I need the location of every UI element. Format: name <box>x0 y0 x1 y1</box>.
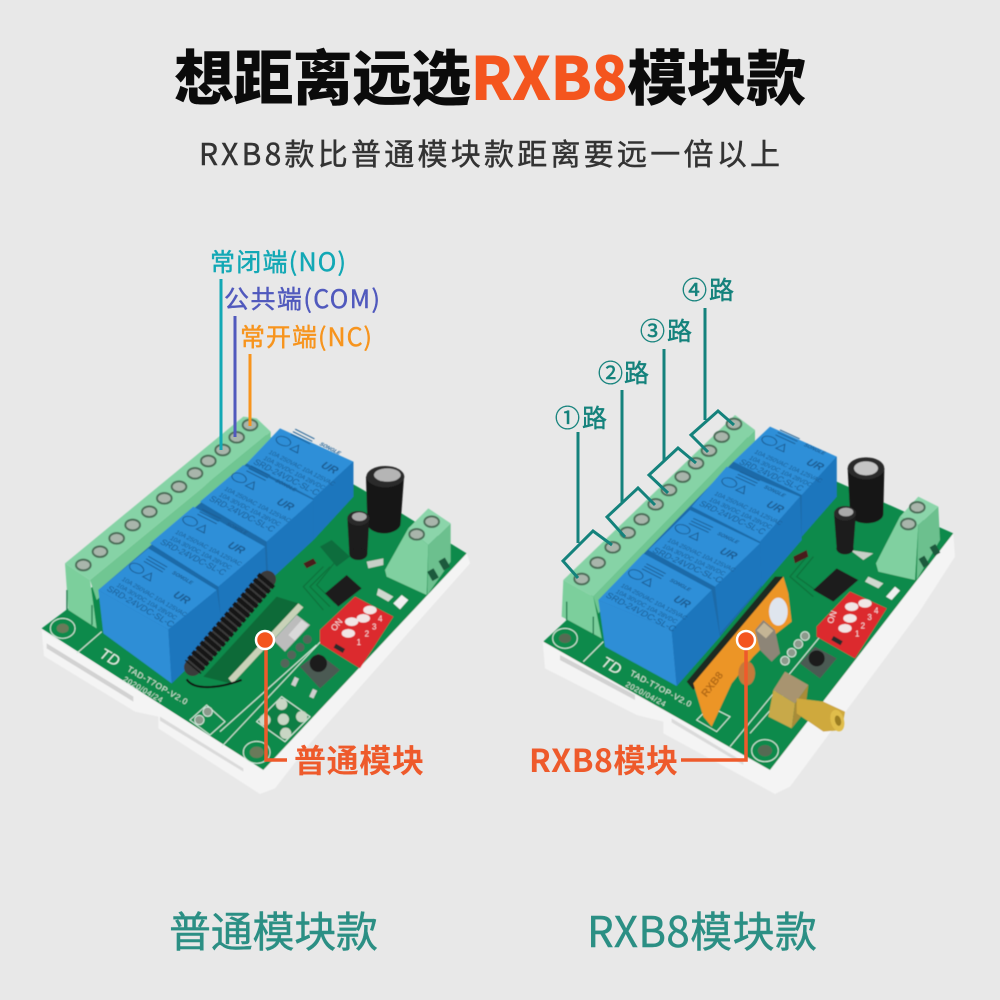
capacitors <box>834 457 884 554</box>
callout: RXB8 module <box>529 631 755 782</box>
callout: normally closed terminal <box>210 243 346 450</box>
board silk text <box>598 654 694 709</box>
product photo: RXB8 module board <box>543 415 955 794</box>
board silk text: TAD-T7OP-V2.0 <box>126 665 190 707</box>
capacitors <box>347 466 404 560</box>
callout: channel 1 <box>555 399 612 578</box>
gold SMA antenna connector <box>768 672 847 733</box>
power terminal block <box>385 508 451 595</box>
long green terminal block <box>562 415 755 638</box>
black spring antenna <box>187 579 267 687</box>
callout: standard module: 普通模块 <box>294 736 424 782</box>
standard receiver module <box>187 579 312 687</box>
red DIP switch: ON <box>329 616 345 633</box>
blue relay 1: 10A 30VDC 10A 28VDC <box>115 582 179 622</box>
blue relay 3: UR <box>274 497 297 514</box>
title: 想距离远选RXB8模块款 <box>174 31 806 118</box>
blue relay 4: 10A 30VDC 10A 28VDC <box>261 455 327 491</box>
green circuit board <box>543 437 953 770</box>
blue relay 1: 10A 250VAC 10A 125VAC <box>120 576 189 618</box>
blue relay 1: SRD-24VDC-SL-C <box>105 584 177 629</box>
blue relay 4: UR <box>318 460 341 477</box>
blue relay 1: 10A 30VDC 10A 28VDC <box>614 589 679 625</box>
blue relay 4 <box>247 424 357 540</box>
tact button <box>291 653 340 699</box>
callout: channel 4 <box>682 271 734 452</box>
red DIP switch: 1 <box>855 630 860 639</box>
callout: normally open terminal <box>240 318 372 426</box>
red DIP switch: 2 <box>861 621 866 630</box>
red DIP switch: ON <box>825 609 839 625</box>
callout: RXB8 module: RXB8模块 <box>529 736 678 782</box>
callout: channel 2: ②路 <box>598 354 649 390</box>
tact button <box>800 647 837 678</box>
blue relay 2: SONGLE <box>224 522 249 537</box>
red DIP switch: 4 <box>874 606 879 615</box>
terminal screws <box>574 419 741 584</box>
blue relay 2 <box>648 510 762 633</box>
blue relay 2: SRD-24VDC-SL-C <box>158 537 229 577</box>
callout: channel 4: ④路 <box>682 271 734 307</box>
board silk text: 2020/04/24 <box>122 675 165 705</box>
white mounting base <box>543 533 955 794</box>
blue relay 3: SRD-24VDC-SL-C <box>697 499 768 536</box>
callout: normally closed terminal: 常闭端(NO) <box>210 243 346 279</box>
blue relay 4: SONGLE <box>802 443 827 457</box>
relay bank shadow backing <box>98 462 353 683</box>
blue relay 3: 10A 30VDC 10A 28VDC <box>217 492 283 528</box>
blue relay 1 <box>98 548 223 683</box>
red DIP switch: 4 <box>378 614 383 623</box>
board silk text: TD <box>96 645 123 670</box>
subtitle: RXB8款比普通模块款距离要远一倍以上 <box>199 130 780 174</box>
blue relay 3 <box>200 461 313 582</box>
callout: channel 1: ①路 <box>555 399 607 435</box>
blue relay 4: UR <box>803 457 827 473</box>
blue relay 4: SRD-24VDC-SL-C <box>737 457 806 493</box>
blue relay 2: 10A 30VDC 10A 28VDC <box>661 544 727 577</box>
green circuit board <box>42 433 467 770</box>
blue relay 2: 10A 250VAC 10A 125VAC <box>666 538 737 574</box>
board silk text: TD <box>598 654 624 679</box>
blue relay 1: UR <box>170 589 193 607</box>
callout: channel 2 <box>598 354 655 537</box>
caption: RXB8 module version: RXB8模块款 <box>587 899 817 960</box>
blue relay 1: UR <box>670 594 694 611</box>
blue relay 1 <box>598 553 720 686</box>
white mounting base <box>42 553 470 794</box>
blue relay 2: 10A 30VDC 10A 28VDC <box>168 535 234 571</box>
blue relay 1: SRD-24VDC-SL-C <box>604 591 679 634</box>
blue relay 1: 10A 250VAC 10A 125VAC <box>619 583 689 622</box>
blue relay 4: 10A 250VAC 10A 125VAC <box>267 449 337 488</box>
callout: normally open terminal: 常开端(NC) <box>240 318 372 354</box>
board silk text: TAD-T7OP-V2.0 <box>628 668 694 709</box>
red DIP switch <box>817 592 887 658</box>
blue relay 2: 10A 250VAC 10A 125VAC <box>173 529 244 568</box>
blue relay 1: SONGLE <box>668 578 692 593</box>
callout: channel 3 <box>640 312 696 493</box>
caption: standard module version: 普通模块款 <box>169 899 378 960</box>
callout: common terminal <box>224 280 380 437</box>
blue relay 4: SONGLE <box>318 442 342 457</box>
board silk text: 2020/04/24 <box>624 680 668 709</box>
terminal screws <box>76 420 257 570</box>
red DIP switch: 3 <box>867 613 872 622</box>
blue relay 3 <box>692 467 802 587</box>
callout: standard module <box>256 631 424 782</box>
board silk text <box>96 645 190 707</box>
blue relay 3: 10A 250VAC 10A 125VAC <box>222 486 293 524</box>
red DIP switch <box>320 597 393 668</box>
blue relay 2 <box>150 504 267 630</box>
blue relay 4: 10A 250VAC 10A 125VAC <box>752 449 824 485</box>
relay bank shadow backing <box>598 457 837 686</box>
blue relay 2: SRD-24VDC-SL-C <box>650 546 726 585</box>
red DIP switch: 1 <box>357 638 362 647</box>
blue relay 2: UR <box>225 540 248 557</box>
blue relay 4: SRD-24VDC-SL-C <box>251 457 322 497</box>
red DIP switch: 3 <box>372 622 377 631</box>
blue relay 4: 10A 30VDC 10A 28VDC <box>747 455 814 488</box>
blue relay 3: UR <box>763 499 787 516</box>
blue relay 3: 10A 250VAC 10A 125VAC <box>712 491 784 527</box>
callout: common terminal: 公共端(COM) <box>224 280 380 316</box>
product photo: standard module board <box>42 417 470 794</box>
blue relay 1: SONGLE <box>170 570 194 586</box>
orange RXB8 module <box>687 577 792 727</box>
long green terminal block <box>65 417 271 628</box>
blue relay 2: SONGLE <box>715 531 740 546</box>
blue relay 3: SONGLE <box>273 478 298 493</box>
blue relay 3: 10A 30VDC 10A 28VDC <box>707 497 774 531</box>
blue relay 3: SONGLE <box>762 485 787 499</box>
blue relay 3: SRD-24VDC-SL-C <box>207 494 278 534</box>
power terminal block <box>876 497 940 580</box>
callout: channel 3: ③路 <box>640 312 692 348</box>
blue relay 4 <box>733 426 842 537</box>
red DIP switch: 2 <box>365 630 370 639</box>
blue relay 2: UR <box>717 546 740 562</box>
orange RXB8 module: RXB8 <box>699 670 726 700</box>
